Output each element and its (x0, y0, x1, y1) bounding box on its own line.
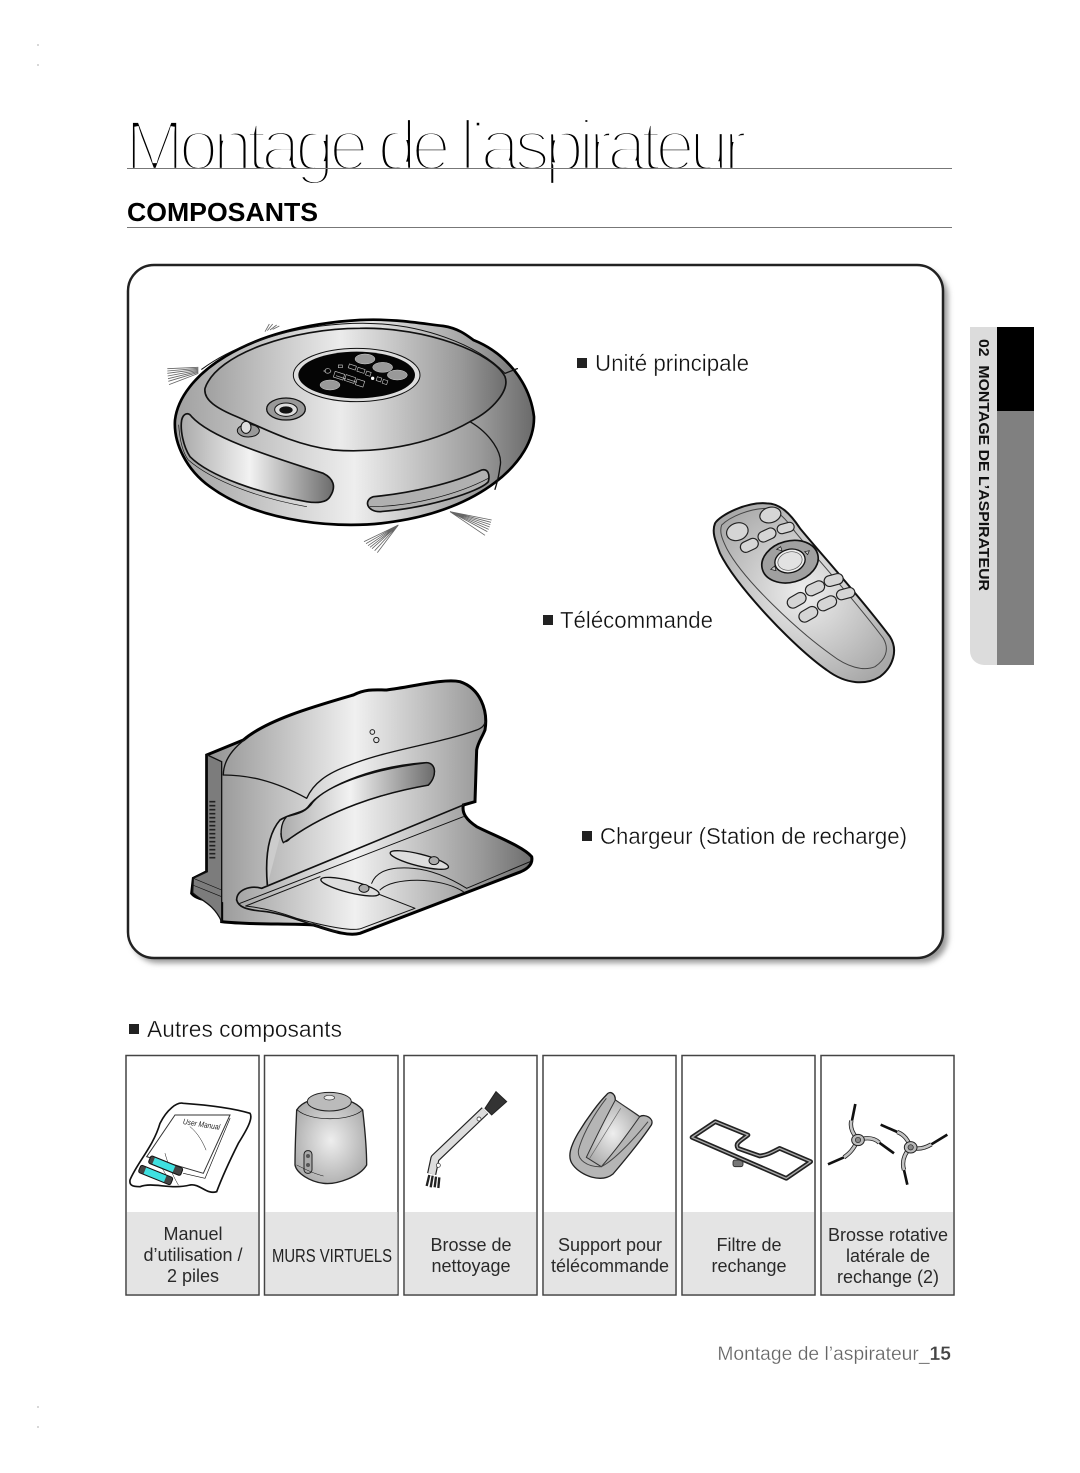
item: manuel et piles (126, 1056, 259, 1295)
led display (323, 364, 388, 387)
item: support pour télécommande (543, 1056, 676, 1295)
caption: Support pour (558, 1235, 662, 1255)
caption: latérale de (846, 1246, 930, 1266)
item: filtre de rechange (682, 1056, 815, 1295)
caption: d’utilisation / (143, 1245, 243, 1265)
caption: MURS VIRTUELS (272, 1246, 392, 1266)
tiny registration marks (37, 44, 39, 1428)
caption: Filtre de (716, 1235, 782, 1255)
icon: robot vacuum main unit (167, 320, 534, 553)
heading: composants: COMPOSANTS (127, 197, 318, 227)
item: brosse de nettoyage (404, 1056, 537, 1295)
icon: manual bag: User Manual (182, 1117, 221, 1132)
caption: Brosse de (430, 1235, 512, 1255)
caption: télécommande (551, 1256, 669, 1276)
caption: rechange (711, 1256, 787, 1276)
label: autres composants: Autres composants (147, 1016, 342, 1042)
caption: 2 piles (167, 1266, 219, 1286)
sidebar: chapter tab: 02 MONTAGE DE L’ASPIRATEUR (975, 339, 991, 592)
icon: remote control (714, 503, 894, 682)
icon: remote holder (570, 1093, 652, 1178)
icon: charging station (192, 681, 532, 934)
icon: cleaning brush (427, 1092, 507, 1188)
caption: nettoyage (431, 1256, 511, 1276)
label: unité principale: Unité principale (595, 350, 749, 376)
icon: filter (692, 1122, 811, 1178)
caption: Brosse rotative (828, 1225, 948, 1245)
panel: main components (128, 265, 948, 963)
title rule (127, 168, 952, 169)
icon: manual bag (130, 1103, 251, 1192)
page footer: Montage de l’aspirateur_15 (717, 1344, 951, 1365)
title: Montage de l’aspirateur (125, 107, 747, 186)
item: brosse rotative (821, 1056, 954, 1295)
label: télécommande: Télécommande (560, 607, 713, 633)
item: murs virtuels (264, 1056, 398, 1295)
sidebar: chapter tab (970, 327, 1034, 665)
icon: virtual wall (295, 1092, 367, 1184)
icon: side brushes (828, 1104, 947, 1185)
caption: Manuel (163, 1224, 223, 1244)
label: chargeur: Chargeur (Station de recharge) (600, 823, 907, 849)
caption: rechange (2) (837, 1267, 939, 1287)
